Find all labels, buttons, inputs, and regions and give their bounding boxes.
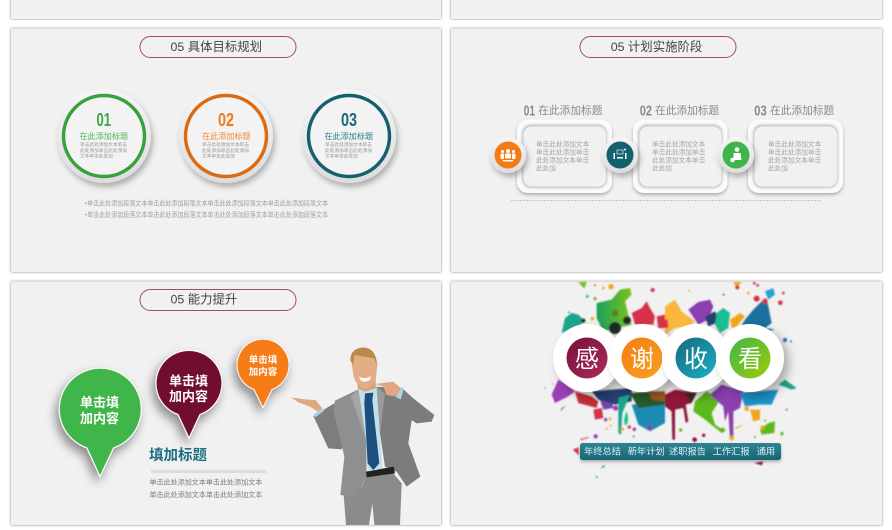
goal circle 03: 此处添加单击此处添加 bbox=[325, 147, 372, 154]
panel: implementation stages bbox=[451, 28, 882, 272]
goal circle 01: 在此添加标题 bbox=[80, 131, 128, 141]
stage card 3 bbox=[748, 120, 843, 193]
goal circle 03: 文本单击此处加 bbox=[325, 152, 358, 160]
pin: orange: 加内容 bbox=[249, 366, 278, 378]
goal circle 01: 此处添加单击此处添加 bbox=[80, 147, 127, 154]
icon: person with gear bbox=[718, 137, 754, 173]
circle: 收: 收 bbox=[684, 346, 708, 373]
paragraph text: •单击此处添加段落文本单击此处添加段落文本单击此处添加段落文本单击此处添加段落文本 bbox=[85, 210, 328, 219]
pin: orange: 单击填 bbox=[249, 354, 278, 366]
pin: crimson: 加内容 bbox=[169, 389, 208, 404]
heading pill: stages: 05 计划实施阶段 bbox=[611, 39, 702, 54]
businessman photo bbox=[291, 347, 434, 525]
stage card 2: 单击此处添加文本 bbox=[652, 140, 706, 148]
goal circle 02 bbox=[179, 89, 273, 183]
stage card 2 bbox=[633, 120, 728, 193]
paragraph text bbox=[85, 198, 328, 219]
panel: top right slide stub bbox=[451, 0, 882, 19]
panel: top left slide stub bbox=[11, 0, 441, 19]
description text: 单击此处添加文本单击此处添加文本 bbox=[150, 490, 262, 499]
goal circle 03: 单击此处添加文本单击 bbox=[325, 141, 372, 148]
stage headings: 在此添加标题 bbox=[770, 104, 834, 117]
circle: 感: 感 bbox=[575, 346, 599, 373]
goal circle 01 bbox=[57, 89, 151, 183]
panel: goals planning bbox=[11, 28, 441, 272]
heading pill: goals: 05 具体目标规划 bbox=[170, 39, 262, 54]
subheading: 填加标题 bbox=[149, 446, 207, 464]
description text: 单击此处添加文本单击此处添加文本 bbox=[150, 478, 262, 487]
circle: 谢: 谢 bbox=[630, 346, 654, 373]
icon: exchange bbox=[602, 137, 638, 173]
heading pill: capability: 05 能力提升 bbox=[170, 292, 237, 306]
stage card 3: 单击此处添加单击 bbox=[768, 148, 822, 156]
goal circle 02: 02 bbox=[218, 110, 234, 130]
circle: 感 bbox=[553, 324, 621, 392]
stage card 2: 此处加 bbox=[652, 164, 672, 172]
banner: 工作汇报 bbox=[713, 446, 750, 456]
heading pill: goals bbox=[140, 36, 296, 58]
banner: 述职报告 bbox=[669, 446, 706, 456]
stage headings: 在此添加标题 bbox=[538, 104, 603, 117]
panel: thank you bbox=[451, 282, 882, 525]
pin: crimson bbox=[156, 350, 222, 438]
stage card 3: 单击此处添加文本 bbox=[768, 140, 822, 148]
banner: 年终总结 bbox=[584, 446, 621, 456]
stage card 1: 此处加 bbox=[536, 164, 556, 172]
goal circle 02: 文本单击此处加 bbox=[202, 152, 235, 160]
paragraph text: •单击此处添加段落文本单击此处添加段落文本单击此处添加段落文本单击此处添加段落文本 bbox=[85, 198, 328, 208]
pin: green: 单击填 bbox=[80, 395, 119, 410]
icon: team bbox=[490, 137, 526, 173]
stage card 2: 此处添加文本单击 bbox=[652, 156, 706, 164]
pin: orange bbox=[237, 339, 289, 408]
paint splash bbox=[544, 282, 797, 478]
banner: 新年计划 bbox=[628, 446, 665, 456]
goal circle 03: 在此添加标题 bbox=[324, 131, 373, 141]
stage card 1: 单击此处添加单击 bbox=[536, 148, 590, 156]
circle: 收 bbox=[662, 324, 730, 392]
dashed divider bbox=[511, 200, 821, 202]
pin: crimson: 单击填 bbox=[169, 374, 208, 388]
stage headings: 在此添加标题 bbox=[655, 104, 719, 117]
stage card 3: 此处添加文本单击 bbox=[768, 156, 822, 164]
goal circle 03 bbox=[302, 89, 396, 183]
stage headings bbox=[524, 102, 834, 120]
stage headings: 03 bbox=[754, 102, 767, 120]
description text bbox=[150, 478, 262, 499]
heading pill: capability bbox=[140, 290, 296, 310]
circle: 看: 看 bbox=[738, 346, 762, 373]
heading pill: stages bbox=[580, 36, 736, 58]
goal circle 02: 此处添加单击此处添加 bbox=[202, 147, 249, 154]
circle: 谢 bbox=[608, 324, 676, 392]
divider bar bbox=[151, 470, 266, 473]
goal circle 01: 01 bbox=[96, 110, 111, 130]
circle: 看 bbox=[716, 324, 784, 392]
stage card 1: 此处添加文本单击 bbox=[536, 156, 590, 164]
goal circle 02: 在此添加标题 bbox=[202, 131, 251, 141]
banner: 通用 bbox=[757, 446, 775, 456]
pin: green bbox=[59, 368, 141, 476]
stage card 1: 单击此处添加文本 bbox=[536, 140, 590, 148]
stage headings: 02 bbox=[640, 102, 652, 120]
stage headings: 01 bbox=[524, 102, 535, 120]
banner bbox=[580, 443, 781, 460]
goal circle 02: 单击此处添加文本单击 bbox=[202, 141, 249, 148]
stage card 2: 单击此处添加单击 bbox=[652, 148, 706, 156]
goal circle 01: 文本单击此处加 bbox=[80, 152, 113, 160]
goal circle 01: 单击此处添加文本单击 bbox=[80, 141, 127, 148]
stage card 3: 此处加 bbox=[768, 164, 788, 172]
panel: capability improvement bbox=[11, 282, 441, 525]
stage card 1 bbox=[517, 120, 612, 193]
pin: green: 加内容 bbox=[80, 411, 119, 426]
goal circle 03: 03 bbox=[341, 110, 357, 130]
